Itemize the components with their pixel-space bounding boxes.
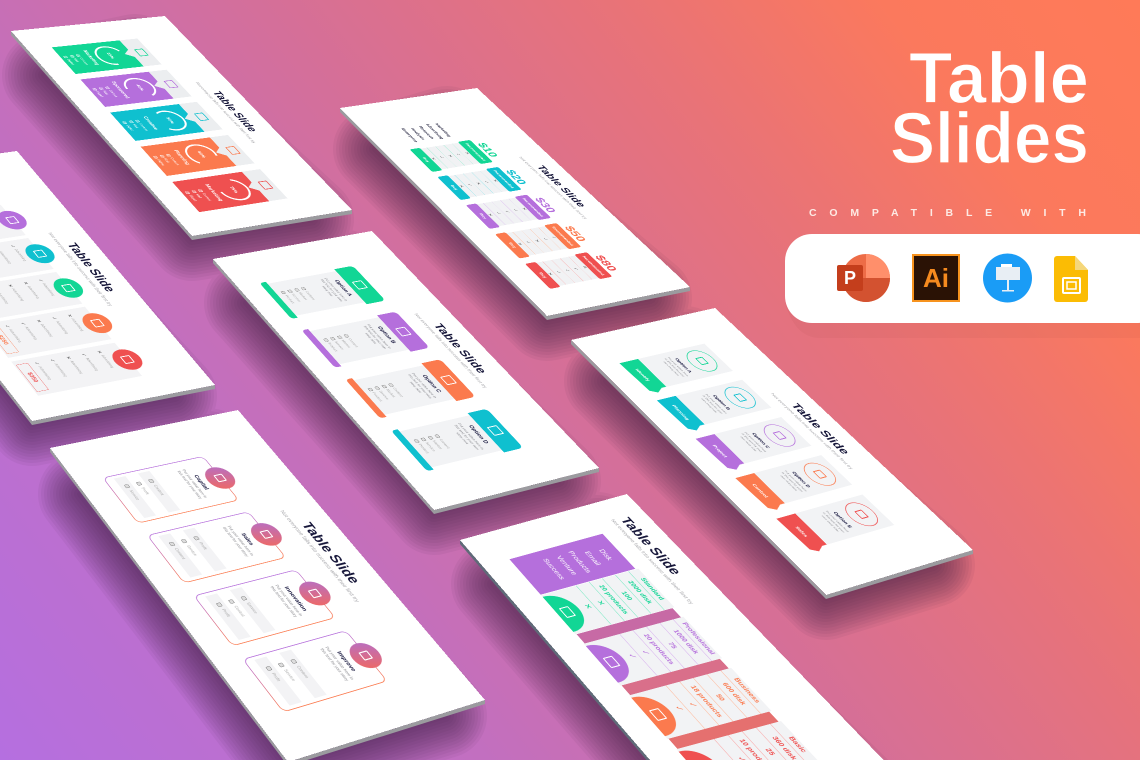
card: Option C: Put your value here in this text for your own story now [407,373,437,399]
column: cyan $100: Advertising [13,249,27,261]
column: green $150: Advertising [11,288,25,301]
column: orange $250: Advertising [8,329,22,343]
plan: Business [629,668,772,739]
plan: Professional: ✓ [626,652,639,660]
card: Innovation [193,569,336,646]
main title [890,39,1089,179]
column: red: Mail [195,194,202,198]
slide title: Table Slide [298,521,363,585]
plan: Standard: 100 [620,591,634,601]
plan: Basic: 25 [764,748,777,756]
column: cyan: 50% [165,117,176,124]
separator band [622,659,729,695]
column: $80: ✓ [564,269,572,272]
column: orange $250: ✓ [50,316,58,320]
column: $80: ✓ [555,270,563,274]
row labels: Advertising [425,123,445,139]
plan: Standard: 2000 disk [626,580,654,604]
column: $80 [526,252,620,289]
column: green: Digital [66,59,74,65]
column: orange $250: ✓ [19,322,27,326]
separator band [577,608,681,643]
row header block: Products [566,550,593,574]
column: $10: ✓ [455,153,462,156]
slide title: Table Slide [210,91,260,132]
slide subtitle: Not everyone falls into success with their first try [413,313,488,388]
column: $30: $30 [532,197,559,213]
column: green $150: ✕ [6,284,14,288]
card: Option A: Market [298,292,308,300]
column: green [52,39,162,74]
column: red $350: Advertising [69,360,83,374]
plan: Basic [676,721,823,760]
column: $30 [466,194,559,229]
column: $20: ✕ [458,185,465,188]
column: green: Mail [73,58,79,62]
column: green $150: Advertising [41,283,55,296]
card: Capital: Profit [140,487,150,495]
card: Option A: Product [284,295,295,304]
icon: Illustrator: Ai [923,263,949,293]
card: Option D: Put your value here in this text for your own story now [453,423,484,450]
column: red $350: Advertising [100,355,114,368]
plan: Standard: 20 products [598,584,630,615]
slide title: Table Slide [430,323,489,374]
column: $20: Recommended [493,170,515,189]
card: Option D: Product [418,443,429,454]
main title: Slides [890,99,1089,179]
column: green: Marketing [82,50,100,65]
row labels: Enterprise [401,128,419,143]
row header block [509,534,635,595]
row labels: Analysis [410,128,426,140]
card: Option C [346,360,474,418]
column: orange $250 [0,307,112,358]
slide title: Table Slide [788,402,852,455]
column: cyan [110,102,223,141]
column: $20: ✓ [466,183,474,187]
column: orange: Planning [173,150,191,165]
card: Innovation: Service [245,602,258,614]
plan: Business: Business [732,677,762,704]
column: red $350: Advertising [53,363,68,377]
column: purple: Sponsored [110,81,131,99]
plan: Standard: ✕ [594,599,607,607]
card: Option D: Service [424,442,436,452]
column: $20: ✓ [483,180,491,184]
column: orange: Content [169,157,179,165]
card: Option D [392,410,522,471]
card: Option A [260,266,384,318]
card: Control: Control [751,483,769,498]
card: Sales [776,494,894,552]
card: Option D: Content [438,439,450,449]
card: Planning [657,380,771,430]
slide: ribbons with ring icons [571,308,973,595]
card: Sales: Sales [794,526,809,537]
card: Improve: Service [283,669,296,682]
column: purple: Digital [95,91,104,97]
compatible with label: COMPATIBLE WITH [809,207,1086,219]
plan: Professional: ✓ [639,649,652,657]
card: Capital [102,456,239,524]
card: Control: Put your value here in this text for your own story now [779,470,808,492]
card: Innovation: Put your value here in this text for your story [269,584,303,618]
column: $80: ✕ [581,265,589,269]
column: $50 [496,223,589,258]
column: $10: ✕ [447,154,454,158]
card: Project: Option C [751,432,771,449]
card: Improve: Profit [270,673,281,682]
column: green: Content [79,58,88,65]
slide subtitle: Not everyone falls into success with their first try [279,510,361,603]
column: orange $250: Advertising [24,326,38,340]
plan: Business: 600 disk [721,682,748,706]
column: red: Marketing [204,184,224,202]
card: Planning: Planning [671,404,691,421]
column: purple [80,70,192,107]
column: green $150 [0,272,82,321]
card: Improve: Put your value here in this text for your story [319,646,354,681]
card: Option C: Service [378,390,389,400]
column: orange $250: Advertising [55,321,69,334]
column: orange $250: ✕ [66,314,73,318]
card: Option B: Put your value here in this text for your own story now [362,324,392,349]
plan: Professional: 75 [666,642,678,649]
column: orange: 60% [196,151,207,158]
card: Option A: Put your value here in this text for your own story now [320,278,348,302]
column: $80: Buy [538,272,548,278]
card: Option B: Option B [376,326,397,344]
column: orange: Digital [156,159,165,166]
column: purple: 40% [135,84,145,91]
column: cyan $100: ✓ [9,245,17,248]
column: red [172,169,288,212]
column: $10: ✓ [438,156,445,159]
card: Option C: Market [385,389,396,398]
column: orange [141,135,255,176]
column: $50: ✓ [550,236,558,239]
plan: Standard: ✕ [581,603,594,610]
column: $50: ✕ [533,239,541,243]
main title: Table [909,39,1089,119]
row labels: Marketing [434,123,452,137]
column: $80: Recommended [581,256,605,276]
column: $20: ✕ [475,182,482,185]
column: $30: ✓ [504,210,511,213]
plan: Business: 18 products [689,685,724,718]
card: Sales [147,511,286,583]
card: Innovation: Control [233,605,245,617]
card: Sales: Service [185,545,198,556]
slide subtitle: Not everyone falls into success with their first try [195,82,257,144]
column: $20 [438,167,530,200]
column: $50: ✓ [542,237,549,241]
card: Capital: Content [152,484,165,496]
row header block: Disk [597,549,614,561]
column: $20: ✕ [492,179,499,182]
plan: Professional: Professional [681,622,717,655]
column: red $350: ✓ [33,361,41,366]
column: $10: $10 [475,142,501,158]
column: red $350 [11,343,142,396]
slide subtitle: Not everyone falls into success with their first try [518,156,588,219]
card: Option C: Content [392,387,403,397]
column: $30: ✓ [495,211,503,215]
column: orange: Mail [163,158,170,163]
column: red $350: ✓ [49,359,57,363]
column: $20: $20 [503,169,530,185]
card: Identify: Identify [634,368,651,382]
column: green $150: Advertising [26,286,40,299]
card: Option C: Product [371,392,383,402]
column: purple: Content [108,90,118,97]
column: red $350: Advertising [85,357,99,371]
card: Option A: Service [291,293,301,302]
card: Control: Option D [791,471,811,488]
column: red: Content [201,193,212,201]
slide: five percentage columns [11,16,352,236]
slide title: Table Slide [534,165,588,208]
card: Option B: Content [347,338,358,348]
column: $20: Buy [450,185,459,190]
column: red: Digital [188,195,197,202]
card: Control [736,455,852,510]
row labels [401,123,452,143]
plan: Basic: Basic [787,736,808,753]
column: $50: Recommended [551,226,574,246]
card: Improve: Content [295,665,309,679]
column: $30: Recommended [521,198,544,217]
card: Option A: Option A [333,280,353,296]
column: red $350: Advertising [37,366,52,380]
card: Identify: Put your value here in this text for your own story now [663,357,689,377]
card: Innovation: Innovation [283,586,309,612]
column: orange $250: Advertising [39,324,53,337]
column: red: 75% [228,186,239,193]
column: red $350: $350 [26,372,39,383]
column: purple: Mail [102,91,108,95]
column: $50: Buy [508,242,517,248]
plan: Basic: 360 disk [770,736,799,760]
column: cyan: Creative [142,116,159,130]
plan: Business: ✓ [686,701,700,709]
icon: Keynote [983,254,1032,302]
card: Project: Put your value here in this text for your own story now [739,432,767,453]
column: $80: ✓ [572,267,580,271]
slide subtitle: Not everyone falls into success with their first try [47,232,114,306]
row header block: Venture [555,555,579,576]
card: Option B: Service [333,341,344,350]
column: $10: Buy [422,157,431,163]
column: cyan $100 [0,238,54,286]
slide: plan comparison table [460,494,898,760]
column: cyan: Content [138,123,148,131]
slide: options A to D [213,231,599,510]
card: Sales: Sales [240,532,255,546]
icon: Illustrator [913,255,959,301]
column: purple $50 [0,205,26,251]
column: cyan: Mail [132,124,139,128]
card: Option B: Product [327,342,338,352]
card: Innovation: Profit [221,609,231,617]
card: Capital: Put your value here in this text for your story [176,469,208,499]
column: $10 [410,140,501,172]
compatibility panel [785,234,1140,338]
card: Sales: Content [173,548,186,560]
column: orange $250: Advertising [70,318,84,332]
card: Project: Project [712,444,729,458]
plan: Standard [541,569,674,634]
plan: Professional [584,617,722,686]
slide: outlined gradient cards [50,410,485,760]
slide: circle icon columns with prices (cropped at left) [0,151,215,421]
row labels: Research [418,126,435,139]
card: Identify [620,344,732,392]
column: red $350: ✓ [80,353,88,357]
column: $30: ✕ [521,207,528,210]
column: $80: $80 [592,254,620,272]
column: orange $250: ✓ [3,325,11,329]
plan: Business: ✓ [673,705,686,713]
plan: Standard: Standard [639,577,666,601]
column: $10: ✕ [463,152,471,155]
column: $50: $50 [562,225,589,242]
column: $80: ✕ [547,272,554,276]
card: Option A: Content [304,291,315,300]
card: Sales: Put your value here in this text for your own story now [821,510,850,533]
slide subtitle: Not everyone falls into success with their first try [770,393,854,470]
icon: PowerPoint [837,254,890,302]
column: green $150: ✕ [22,281,29,285]
slide title: Table Slide [64,242,118,293]
card: Identify: Option A [674,358,693,373]
card: Capital: Capital [193,474,210,490]
card: Option B [303,312,428,368]
column: $50: ✓ [525,241,532,244]
column: cyan: Digital [125,125,134,131]
icon [134,49,149,56]
card: Option B: Market [340,340,351,348]
column: green $150: ✓ [37,279,45,283]
column: red $350: ✕ [64,356,72,360]
plan: Professional: 20 products [642,633,676,665]
column: $30: ✓ [512,208,520,212]
column: $50: ✕ [516,242,524,246]
card: Option C: Option C [421,374,442,393]
column: $30: ✕ [487,213,494,217]
column: $30: Buy [478,213,488,219]
plan: Business: 50 [714,693,727,701]
separator band [669,712,779,749]
card: Option D: Market [431,440,442,449]
card: Sales: Put your value here in this text for your story [222,525,254,557]
card: Project [696,417,811,470]
slide: pricing table [340,88,690,316]
card: Capital: Service [128,490,140,501]
icon: Google Slides [1054,256,1088,302]
row header block: Email [583,551,602,566]
card: Improve [242,630,388,712]
card: Planning: Put your value here in this text for your own story now [700,394,728,414]
slide subtitle: Not everyone falls into success with their first try [609,519,695,605]
row header block: Success [541,558,566,580]
card: Improve: Improve [335,651,357,672]
icon: PowerPoint: P [844,268,856,288]
column: $10: ✕ [430,157,437,160]
card: Sales: Profit [198,542,207,550]
plan: Professional: 1000 disk [672,629,700,655]
card: Option D: Option D [467,425,489,444]
slide title: Table Slide [617,516,684,576]
column: red $350: ✕ [95,350,103,354]
column: orange $250: ✕ [35,319,43,323]
column: $10: Recommended [464,143,486,161]
column: green: 25% [105,52,116,59]
card: Sales: Option E [832,511,853,528]
card: Planning: Option B [712,394,731,410]
